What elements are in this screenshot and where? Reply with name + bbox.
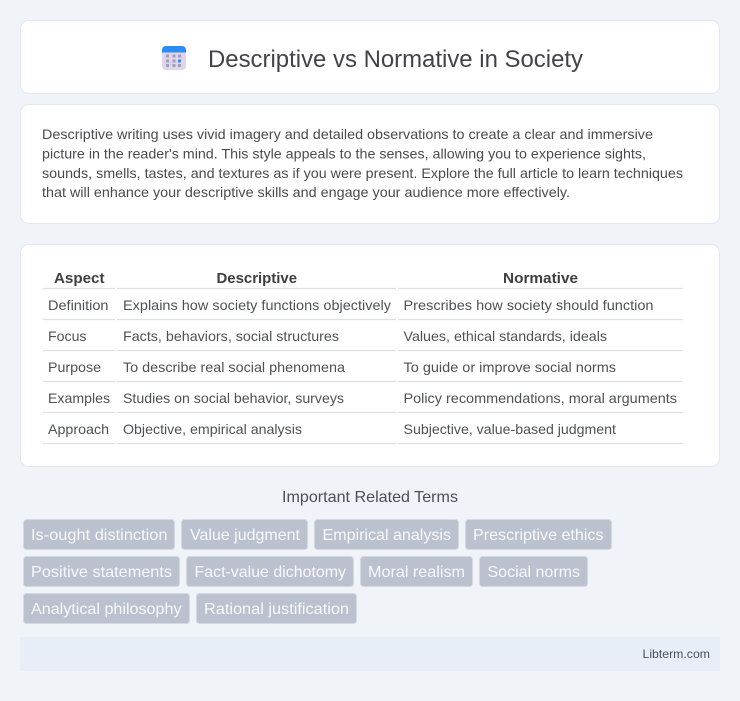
row: approach: Approach <box>48 421 109 437</box>
row: purpose <box>48 359 616 375</box>
related terms tags: Analytical philosophy <box>31 601 182 618</box>
table column headers: Aspect <box>54 270 104 287</box>
footer credit: Libterm.com <box>642 647 710 661</box>
row: definition <box>48 297 654 313</box>
intro paragraph: sounds, smells, tastes, and textures as if you were present. Explore the full article to learn techniques <box>42 165 683 181</box>
intro paragraph <box>42 126 683 200</box>
row: approach <box>48 421 616 437</box>
table column headers: Normative <box>503 270 578 287</box>
row: purpose: To guide or improve social norms <box>404 359 616 375</box>
related terms heading: Important Related Terms <box>282 489 458 506</box>
title: Descriptive vs Normative in Society <box>208 46 583 73</box>
intro paragraph: picture in the reader's mind. This style appeals to the senses, allowing you to experience sights, <box>42 146 646 162</box>
related terms tags: Fact-value dichotomy <box>194 564 346 581</box>
row: focus: Focus <box>48 328 86 344</box>
intro paragraph: that will enhance your descriptive skills and engage your audience more effectively. <box>42 184 570 200</box>
header panel <box>20 20 720 94</box>
row: focus: Facts, behaviors, social structures <box>123 328 339 344</box>
related terms tags: Social norms <box>488 564 580 581</box>
related terms tags: Moral realism <box>368 564 465 581</box>
row: examples: Examples <box>48 390 110 406</box>
row: examples: Studies on social behavior, surveys <box>123 390 344 406</box>
row: purpose: Purpose <box>48 359 101 375</box>
footer bar <box>20 637 720 671</box>
intro paragraph: Descriptive writing uses vivid imagery and detailed observations to create a clear and immersive <box>42 126 653 142</box>
related terms tags: Rational justification <box>204 601 349 618</box>
row: approach: Objective, empirical analysis <box>123 421 302 437</box>
table column headers: Descriptive <box>216 270 297 287</box>
table column headers <box>54 270 578 287</box>
row: definition: Definition <box>48 297 108 313</box>
intro text panel <box>20 104 720 224</box>
related terms tags: Is-ought distinction <box>31 527 168 544</box>
related terms tags: Prescriptive ethics <box>473 527 604 544</box>
row: examples <box>48 390 677 406</box>
row: focus: Values, ethical standards, ideals <box>404 328 607 344</box>
row: definition: Prescribes how society should function <box>404 297 654 313</box>
comparison table panel <box>20 244 720 466</box>
related terms tags <box>24 520 612 624</box>
row: focus <box>48 328 607 344</box>
icon: calendar <box>162 46 186 70</box>
row: purpose: To describe real social phenomena <box>123 359 345 375</box>
row: examples: Policy recommendations, moral arguments <box>404 390 677 406</box>
related terms tags: Empirical analysis <box>322 527 451 544</box>
related terms tags: Value judgment <box>190 527 301 544</box>
related terms tags: Positive statements <box>31 564 172 581</box>
row: approach: Subjective, value-based judgment <box>404 421 616 437</box>
row: definition: Explains how society functions objectively <box>123 297 391 313</box>
